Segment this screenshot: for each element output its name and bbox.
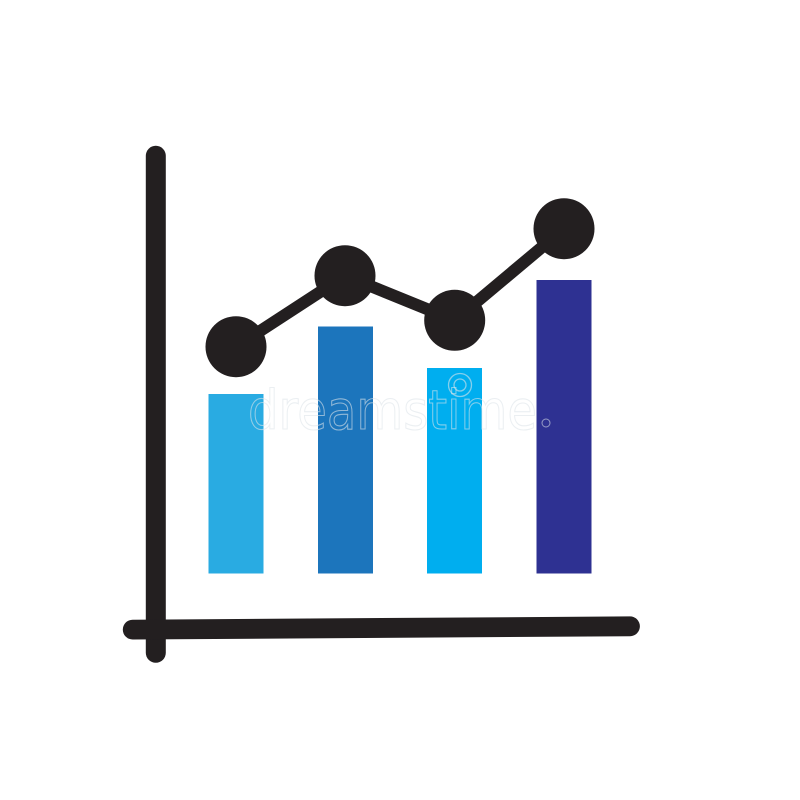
- data point 1: [206, 316, 266, 377]
- bar 4: [536, 280, 592, 574]
- watermark: dreamstime: [248, 379, 537, 442]
- bar 2: [318, 326, 373, 574]
- data point 3: [424, 290, 485, 351]
- vertical axis: [146, 156, 166, 653]
- horizontal axis: [133, 626, 630, 630]
- line connecting points: [236, 229, 564, 347]
- bar 1: [208, 394, 264, 574]
- bar 3: [427, 368, 482, 574]
- data point 2: [314, 245, 376, 306]
- data point 4: [534, 198, 594, 259]
